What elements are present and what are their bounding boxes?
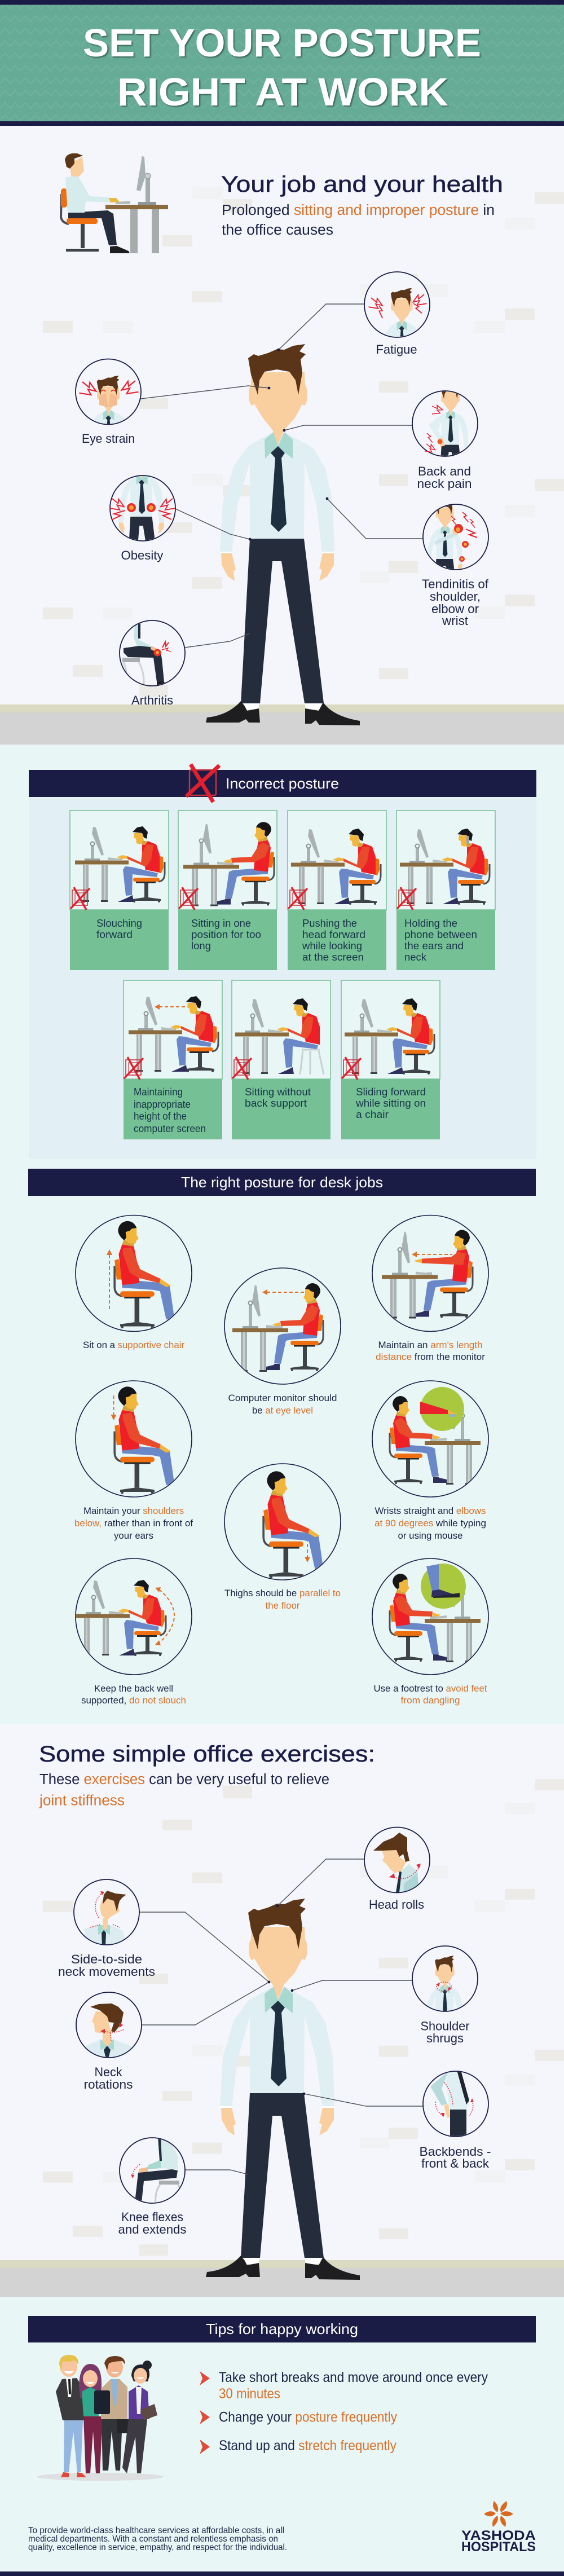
label: back and neck pain: [417, 464, 472, 491]
tip 1: 30 minutes: [219, 2386, 280, 2402]
icon: head rolls: [364, 1828, 430, 1894]
circle: arm's length: Maintain an arm's length: [378, 1340, 483, 1350]
card: sitting too long: Sitting in one: [191, 917, 251, 929]
exercises section background: [0, 1724, 564, 2260]
header banner: [0, 0, 564, 126]
card: pushing the head forward: while looking: [302, 940, 362, 952]
label: tendinitis: elbow or: [431, 602, 479, 616]
label: knee flexes: and extends: [118, 2222, 186, 2236]
icon: backbends: [423, 2070, 488, 2139]
card: inappropriate height: [124, 980, 222, 1139]
heading: your job and your health: Your job and your health: [221, 172, 503, 197]
card: holding the phone: Holding the: [404, 917, 457, 929]
footer mission text: [28, 2526, 287, 2552]
icon: eye strain: [75, 359, 142, 425]
card: sitting too long: long: [191, 940, 211, 952]
card: holding the phone: phone between: [404, 928, 477, 940]
tip 3: Stand up and stretch frequently: [219, 2438, 396, 2454]
label: neck rotations: rotations: [83, 2077, 133, 2091]
heading: office exercises: [39, 1742, 375, 1808]
label: side-to-side neck movements: Side-to-side: [71, 1952, 142, 1966]
label: knee flexes: [118, 2210, 186, 2236]
exercises intro: joint stiffness: [39, 1793, 125, 1808]
circle: shoulders below: [74, 1381, 193, 1541]
heading bar: tips: Tips for happy working: [206, 2320, 358, 2337]
floor: [0, 704, 564, 745]
figure: standing man: [206, 344, 360, 725]
circle: footrest: Use a footrest to avoid feet: [373, 1683, 487, 1694]
figure: standing man 2: [206, 1899, 360, 2280]
card: holding the phone: neck: [404, 951, 427, 963]
card: no back support: back support: [245, 1097, 307, 1109]
logo: Yashoda Hospitals: HOSPITALS: [461, 2539, 536, 2555]
circle: thighs parallel: Thighs should be parallel to: [224, 1588, 341, 1599]
label: shoulder shrugs: shrugs: [426, 2031, 464, 2045]
circle: thighs parallel: the floor: [265, 1600, 300, 1611]
label: arthritis: Arthritis: [131, 693, 173, 707]
icon: arthritis: [120, 619, 185, 686]
label: tendinitis: [422, 577, 489, 628]
bottom band: [0, 2571, 564, 2576]
label: knee flexes: Knee flexes: [121, 2210, 183, 2224]
card: slouching forward: [70, 811, 169, 970]
circle: arm's length: [372, 1215, 488, 1362]
label: tendinitis: shoulder,: [430, 589, 481, 604]
icon: side-to-side neck: [74, 1879, 139, 1946]
tip 2: Change your posture frequently: [219, 2410, 397, 2425]
circle: footrest: from dangling: [400, 1695, 460, 1706]
card: holding the phone: the ears and: [404, 940, 464, 952]
exercises intro: [39, 1772, 329, 1808]
circle: wrists and elbows: at 90 degrees while typing: [374, 1518, 486, 1529]
floor 2: [0, 2260, 564, 2297]
label: neck rotations: Neck: [95, 2065, 122, 2079]
icon: shoulder shrugs: [412, 1945, 478, 2012]
icon: knee flexes: [120, 2137, 185, 2205]
footer mission text: medical departments. With a constant and relentless emphasis on: [28, 2534, 278, 2544]
label: tendinitis: wrist: [442, 614, 468, 628]
card: inappropriate height: computer screen: [134, 1122, 206, 1134]
label: shoulder shrugs: Shoulder: [421, 2019, 469, 2033]
label: side-to-side neck movements: neck movements: [58, 1965, 155, 1979]
label: fatigue: Fatigue: [376, 342, 417, 356]
label: head rolls: Head rolls: [369, 1897, 424, 1912]
label: neck rotations: [83, 2065, 133, 2091]
card: sliding forward: while sitting on: [355, 1097, 426, 1109]
card: sliding forward: [341, 980, 440, 1139]
circle: monitor at eye level: Computer monitor should: [228, 1393, 337, 1403]
label: back and neck pain: neck pain: [417, 477, 472, 491]
connector lines: [140, 304, 424, 648]
circle: shoulders below: your ears: [114, 1530, 153, 1541]
heading bar: right posture: The right posture for desk jobs: [181, 1174, 383, 1191]
intro text: [222, 202, 495, 238]
logo: Yashoda Hospitals: [461, 2501, 536, 2555]
card: holding the phone: [396, 811, 495, 970]
circle: supportive chair: [76, 1215, 192, 1350]
icon: neck rotations: [76, 1992, 142, 2059]
logo: Yashoda Hospitals: YASHODA: [461, 2528, 536, 2543]
title: [83, 21, 481, 114]
card: sliding forward: Sliding forward: [356, 1086, 426, 1098]
circle: wrists and elbows: or using mouse: [398, 1530, 462, 1541]
card: pushing the head forward: Pushing the: [302, 917, 357, 929]
circle: back supported: supported, do not slouch: [81, 1695, 186, 1706]
circle: footrest: [372, 1558, 488, 1706]
icon: back and neck pain: [412, 390, 478, 457]
heading bar: incorrect posture: Incorrect posture: [226, 775, 339, 792]
heading bar: incorrect posture: [29, 764, 536, 802]
card: no back support: [232, 980, 331, 1139]
card: inappropriate height: Maintaining: [134, 1086, 183, 1098]
exercises intro: These exercises can be very useful to relieve: [39, 1772, 329, 1787]
icon: tendinitis: [422, 504, 489, 570]
title: SET YOUR POSTURE: [83, 21, 481, 65]
circle: wrists and elbows: Wrists straight and elbows: [374, 1505, 486, 1516]
label: obesity: Obesity: [121, 548, 164, 562]
label: shoulder shrugs: [421, 2019, 469, 2045]
label: back and neck pain: Back and: [418, 464, 471, 478]
title: RIGHT AT WORK: [117, 70, 448, 114]
panel: incorrect posture: [29, 764, 536, 1159]
label: backbends: front & back: [421, 2156, 490, 2170]
label: eye strain: Eye strain: [82, 431, 135, 446]
tips list: [200, 2370, 488, 2454]
intro text: Prolonged sitting and improper posture in: [222, 202, 495, 218]
circle: supportive chair: Sit on a supportive chair: [83, 1340, 184, 1350]
circle: shoulders below: Maintain your shoulders: [83, 1505, 184, 1516]
icon: fatigue: [364, 271, 430, 338]
card: slouching forward: Slouching: [96, 917, 142, 929]
label: backbends: Backbends -: [420, 2145, 491, 2159]
card: inappropriate height: height of the: [134, 1110, 187, 1122]
circle: back supported: Keep the back well: [94, 1683, 173, 1694]
card: sitting too long: [178, 811, 277, 970]
circle: thighs parallel: [224, 1464, 341, 1611]
footer mission text: To provide world-class healthcare services at affordable costs, in all: [28, 2526, 284, 2535]
icon: obesity: [109, 475, 176, 541]
illustration: team of four: [37, 2355, 164, 2481]
card: no back support: Sitting without: [245, 1086, 311, 1098]
circle: back supported: [76, 1558, 192, 1706]
circle: monitor at eye level: [224, 1268, 341, 1416]
intro text: the office causes: [222, 222, 333, 238]
tip 1: Take short breaks and move around once every: [219, 2370, 488, 2385]
heading: office exercises: Some simple office exercises:: [39, 1742, 375, 1767]
circle: monitor at eye level: be at eye level: [252, 1405, 313, 1416]
card: pushing the head forward: head forward: [302, 928, 365, 940]
connector lines 2: [139, 1859, 424, 2174]
heading bar: tips: [28, 2316, 536, 2342]
heading: your job and your health: [221, 172, 503, 238]
circle: arm's length: distance from the monitor: [376, 1351, 485, 1362]
circle: shoulders below: below, rather than in front of: [74, 1518, 193, 1529]
card: slouching forward: forward: [96, 928, 133, 940]
label: backbends: [420, 2145, 491, 2170]
tip 1: [200, 2370, 488, 2402]
card: pushing the head forward: [288, 811, 386, 970]
icon: man seated at desk: [61, 153, 168, 253]
card: sitting too long: position for too: [191, 928, 261, 940]
card: sliding forward: a chair: [356, 1108, 389, 1120]
heading bar: right posture: [28, 1169, 536, 1196]
label: tendinitis: Tendinitis of: [422, 577, 489, 591]
card: inappropriate height: inappropriate: [134, 1098, 191, 1110]
label: side-to-side neck movements: [58, 1952, 155, 1979]
footer mission text: quality, excellence in service, empathy, and respect for the individual.: [28, 2543, 287, 2552]
circle: wrists and elbows: [372, 1381, 488, 1541]
card: pushing the head forward: at the screen: [302, 951, 364, 963]
